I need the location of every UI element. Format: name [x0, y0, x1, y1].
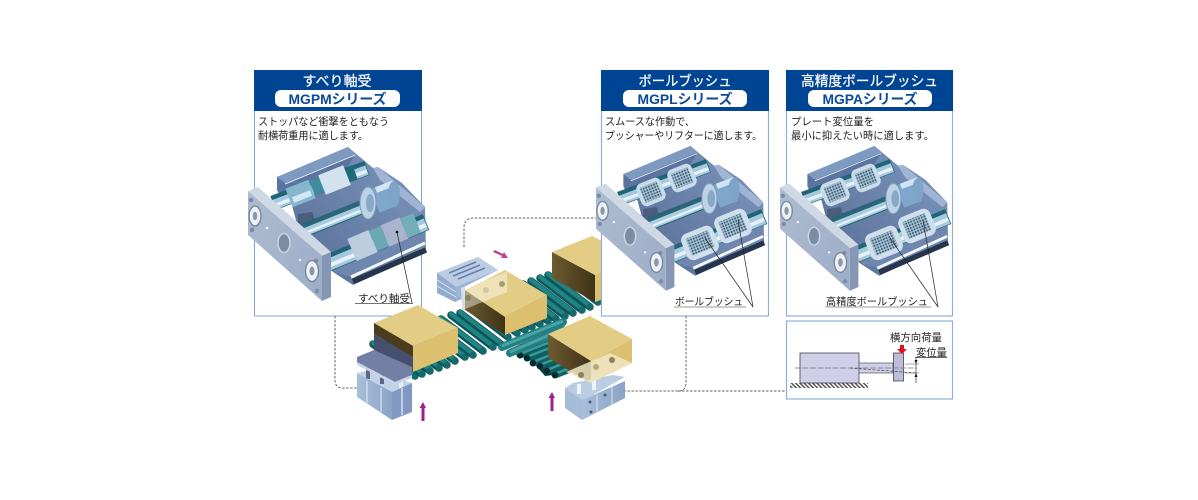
illustration: guided cylinder with sliding bearings [248, 147, 426, 301]
panel: MGPL series [596, 70, 769, 316]
callout: high precision ball bushing label [825, 220, 938, 308]
callout: sliding bearing label [355, 231, 413, 305]
callout: ball bushing label: ボールブッシュ [675, 295, 743, 308]
heading: sliding bearing: すべり軸受 [302, 73, 372, 89]
header: MGPM [254, 70, 422, 111]
description: MGPM [258, 115, 389, 142]
label: lateral load: 横方向荷量 [890, 331, 942, 344]
illustration: guided cylinder with ball bushings [596, 146, 764, 291]
header: MGPL [601, 70, 769, 111]
heading: ball bushing: ボールブッシュ [638, 73, 732, 89]
plate: transparent push plate [461, 272, 507, 310]
dashed connector: right cylinder to diagram [678, 390, 785, 392]
cylinder: right lift [565, 353, 632, 420]
end plate [894, 353, 904, 381]
arrow: pink push direction [493, 250, 508, 258]
illustration: guided cylinder with high precision ball bushings [780, 146, 948, 291]
dashed connector: sliding bearing panel to left cylinder [335, 316, 357, 388]
callout: sliding bearing label: すべり軸受 [358, 292, 410, 305]
description: MGPA: 最小に抑えたい時に適します。 [791, 129, 934, 142]
badge: MGPA series: MGPAシリーズ [822, 91, 918, 107]
badge: MGPM series: MGPMシリーズ [288, 91, 386, 107]
arrow: left lift direction [420, 402, 426, 421]
description: MGPA: プレート変位量を [791, 115, 874, 128]
panel: MGPA series [780, 70, 953, 316]
description: MGPL: スムースな作動で、 [605, 115, 695, 128]
centre line [795, 368, 916, 373]
label: displacement: 変位量 [916, 346, 947, 359]
plate: left lift table [357, 350, 412, 385]
description: MGPA [791, 115, 934, 142]
heading: high precision ball bushing: 高精度ボールブッシュ [801, 73, 938, 89]
icon: red load arrow [897, 345, 907, 354]
dimension: displacement [905, 358, 947, 383]
box: front cargo on left lift [374, 305, 458, 372]
box: front cargo on right lift [548, 316, 632, 383]
description: MGPM: 耐横荷重用に適します。 [258, 129, 368, 142]
rod [859, 363, 893, 373]
dashed connector: ball bushing panel to centre pusher [464, 218, 600, 247]
cylinder: left lift [357, 367, 412, 420]
ground hatching [790, 383, 868, 388]
header: MGPA [786, 70, 953, 111]
conveyor: transverse rollers [502, 321, 584, 378]
arrow: right lift direction [548, 392, 555, 411]
conveyor: rear rollers [466, 269, 601, 340]
cylinder body [800, 353, 859, 383]
description: MGPM: ストッパなど衝撃をともなう [258, 115, 389, 128]
description: MGPL [605, 115, 762, 142]
box: rear cargo [552, 236, 604, 302]
cylinder: rear pusher [437, 257, 498, 302]
box: centre cargo [465, 270, 547, 335]
callout: high precision ball bushing label: 高精度ボールブッシュ [826, 295, 928, 308]
panel: plate displacement diagram [786, 321, 952, 399]
description: MGPL: プッシャーやリフターに適します。 [605, 129, 762, 142]
conveyor: left rollers [373, 312, 505, 379]
panel: MGPM series [248, 70, 426, 316]
callout: ball bushing label [674, 220, 753, 308]
dashed connector: ball bushing panel to right cylinder [625, 316, 686, 391]
badge: MGPL series: MGPLシリーズ [638, 91, 732, 107]
